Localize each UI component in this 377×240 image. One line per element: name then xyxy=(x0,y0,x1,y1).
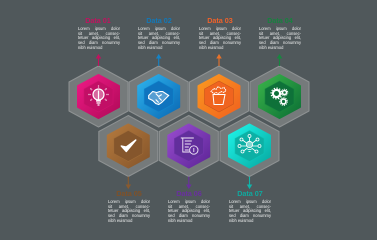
text: Data 01 body xyxy=(78,26,120,50)
hexagon 02: blue handshake xyxy=(129,66,188,127)
text: Data 03 body: tetuer adipiscing elit, xyxy=(199,35,241,40)
text: Data 05 body: nibh euismod xyxy=(108,218,132,223)
title: Data 05: Data 05 xyxy=(116,189,142,198)
text: Data 07 body: sit amet, consec- xyxy=(229,204,271,209)
text: Data 06 body: nibh euismod xyxy=(168,218,192,223)
text: Data 02 body: sit amet, consec- xyxy=(138,31,180,36)
text: Data 02 body xyxy=(138,26,180,50)
title: Data 07: Data 07 xyxy=(237,189,263,198)
text: Data 04 body: Lorem ipsum dolor xyxy=(259,26,301,31)
text: Data 02 body: Lorem ipsum dolor xyxy=(138,26,180,31)
text: Data 05 body: sit amet, consec- xyxy=(108,204,150,209)
icon: gears xyxy=(271,88,288,105)
text: Data 06 body xyxy=(168,199,210,223)
text: Data 01 body: sed diam nonummy xyxy=(78,40,120,45)
text: Data 06 body: sed diam nonummy xyxy=(168,213,210,218)
text: Data 05 body: Lorem ipsum dolor xyxy=(108,199,150,204)
arrow: 01 xyxy=(97,55,100,66)
title: Data 04: Data 04 xyxy=(267,16,293,25)
icon: light bulb xyxy=(88,86,108,105)
text: Data 07 body: tetuer adipiscing elit, xyxy=(229,208,271,213)
icon: plant pot xyxy=(211,86,226,104)
text: Data 04 body: tetuer adipiscing elit, xyxy=(259,35,301,40)
text: Data 03 body xyxy=(199,26,241,50)
text: Data 05 body: tetuer adipiscing elit, xyxy=(108,208,150,213)
title: Data 02: Data 02 xyxy=(146,16,172,25)
text: Data 01 body: tetuer adipiscing elit, xyxy=(78,35,120,40)
arrow: 03 xyxy=(217,55,221,66)
hexagon 01: pink idea xyxy=(69,66,128,127)
icon: idea network xyxy=(238,134,261,153)
text: Data 07 body xyxy=(229,199,271,223)
arrow: 07 xyxy=(248,176,251,188)
hexagon 07: cyan network xyxy=(220,116,279,176)
icon: check mark xyxy=(121,140,136,152)
hexagon 04: green gears xyxy=(250,66,309,127)
text: Data 03 body: sit amet, consec- xyxy=(199,31,241,36)
text: Data 02 body: sed diam nonummy xyxy=(138,40,180,45)
text: Data 01 body: sit amet, consec- xyxy=(78,31,120,36)
text: Data 06 body: sit amet, consec- xyxy=(168,204,210,209)
arrow: 05 xyxy=(126,176,130,188)
text: Data 03 body: sed diam nonummy xyxy=(199,40,241,45)
hexagon 06: purple coins xyxy=(159,116,218,176)
text: Data 06 body: tetuer adipiscing elit, xyxy=(168,208,210,213)
text: Data 07 body: Lorem ipsum dolor xyxy=(229,199,271,204)
title: Data 06: Data 06 xyxy=(176,189,202,198)
text: Data 01 body: nibh euismod xyxy=(78,45,102,50)
text: Data 04 body: nibh euismod xyxy=(259,45,283,50)
text: Data 05 body xyxy=(108,199,150,223)
text: Data 04 body xyxy=(259,26,301,50)
text: Data 05 body: sed diam nonummy xyxy=(108,213,150,218)
icon: document and coin xyxy=(181,138,198,154)
arrow: 02 xyxy=(157,55,160,66)
text: Data 07 body: sed diam nonummy xyxy=(229,213,271,218)
text: Data 02 body: tetuer adipiscing elit, xyxy=(138,35,180,40)
icon: handshake xyxy=(149,92,169,104)
text: Data 02 body: nibh euismod xyxy=(138,45,162,50)
text: Data 03 body: nibh euismod xyxy=(199,45,223,50)
title: Data 03: Data 03 xyxy=(207,16,233,25)
text: Data 03 body: Lorem ipsum dolor xyxy=(199,26,241,31)
text: Data 01 body: Lorem ipsum dolor xyxy=(78,26,120,31)
title: Data 01: Data 01 xyxy=(85,16,111,25)
text: Data 07 body: nibh euismod xyxy=(229,218,253,223)
hexagon 03: orange bucket xyxy=(190,66,248,127)
arrow: 06 xyxy=(187,176,191,188)
text: Data 04 body: sed diam nonummy xyxy=(259,40,301,45)
hexagon 05: brown check xyxy=(99,116,158,176)
text: Data 04 body: sit amet, consec- xyxy=(259,31,301,36)
text: Data 06 body: Lorem ipsum dolor xyxy=(168,199,210,204)
arrow: 04 xyxy=(278,55,281,66)
